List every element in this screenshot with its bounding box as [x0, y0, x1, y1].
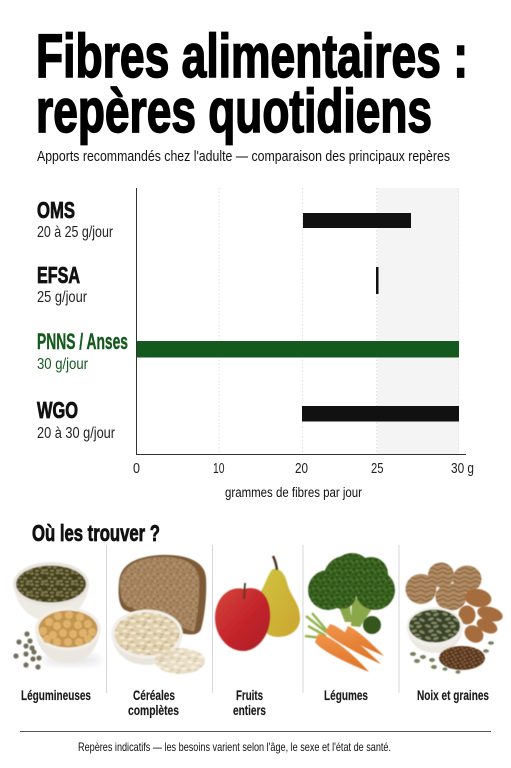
icon: carrots: [305, 613, 384, 672]
axis tick labels: 20: [295, 461, 308, 477]
axis tick labels: 30 g: [451, 461, 474, 477]
food panel: légumineuses: [13, 562, 102, 703]
row label: PNNS / Anses: PNNS / Anses: [37, 329, 128, 354]
axis tick labels: 10: [213, 461, 224, 477]
food panel: céréales complètes: [111, 555, 206, 718]
axes: [136, 188, 466, 454]
row label: OMS: [37, 197, 113, 241]
food panel: noix et graines: [406, 562, 504, 703]
row label: EFSA: [37, 262, 87, 306]
bar: OMS: [303, 213, 411, 228]
bar: EFSA: [376, 267, 378, 294]
row label: WGO: [37, 397, 115, 442]
label: Fruits: [236, 687, 263, 703]
row label: EFSA: 25 g/jour: [37, 289, 87, 306]
footer note: Repères indicatifs — les besoins varient selon l'âge, le sexe et l'état de santé.: [78, 740, 391, 754]
chart: recommended daily fibre intake: [133, 188, 474, 500]
icon: scattered lentils: [13, 631, 42, 670]
label: Légumineuses: [21, 687, 91, 703]
highlighted band 25 to 30 g: [377, 188, 459, 454]
icon: oat flakes bowl: [111, 610, 183, 665]
label: Céréales: [133, 687, 175, 703]
icon: broccoli: [308, 553, 395, 634]
label: [128, 687, 179, 718]
row label: OMS: 20 à 25 g/jour: [37, 224, 113, 241]
icon: pear: [258, 556, 300, 637]
food panel: légumes: [305, 553, 395, 703]
icon: wholegrain bread slice: [119, 555, 206, 634]
icon: flax seeds and scattered seeds: [410, 641, 494, 674]
label: Légumes: [324, 687, 368, 703]
icon: pumpkin seeds bowl: [406, 607, 464, 653]
label: [233, 687, 266, 718]
axis tick labels: 0: [133, 461, 140, 477]
label: complètes: [128, 702, 179, 718]
icon: scattered oats: [155, 648, 205, 674]
bar: WGO: [302, 406, 459, 422]
label: entiers: [233, 702, 266, 718]
row label: EFSA: EFSA: [37, 262, 80, 288]
axis tick labels: [133, 461, 474, 477]
bar: PNNS / Anses: [136, 341, 459, 358]
title: [36, 22, 468, 145]
icon: lentils bowl: [13, 562, 89, 621]
subtitle: Apports recommandés chez l'adulte — comparaison des principaux repères: [37, 149, 450, 165]
icon: apple: [215, 583, 270, 651]
row label: WGO: 20 à 30 g/jour: [37, 425, 115, 442]
icon: chickpeas bowl: [35, 608, 102, 665]
icon: almonds: [458, 587, 504, 646]
section heading: Où les trouver ?: [32, 520, 160, 546]
row label: PNNS / Anses: [37, 329, 128, 373]
icon: walnuts: [406, 562, 482, 610]
axis title: grammes de fibres par jour: [225, 485, 362, 500]
row label: WGO: WGO: [37, 397, 78, 423]
row label: PNNS / Anses: 30 g/jour: [37, 356, 88, 373]
food panel: fruits entiers: [215, 556, 300, 718]
row label: OMS: OMS: [37, 197, 75, 223]
axis tick labels: 25: [371, 461, 384, 477]
